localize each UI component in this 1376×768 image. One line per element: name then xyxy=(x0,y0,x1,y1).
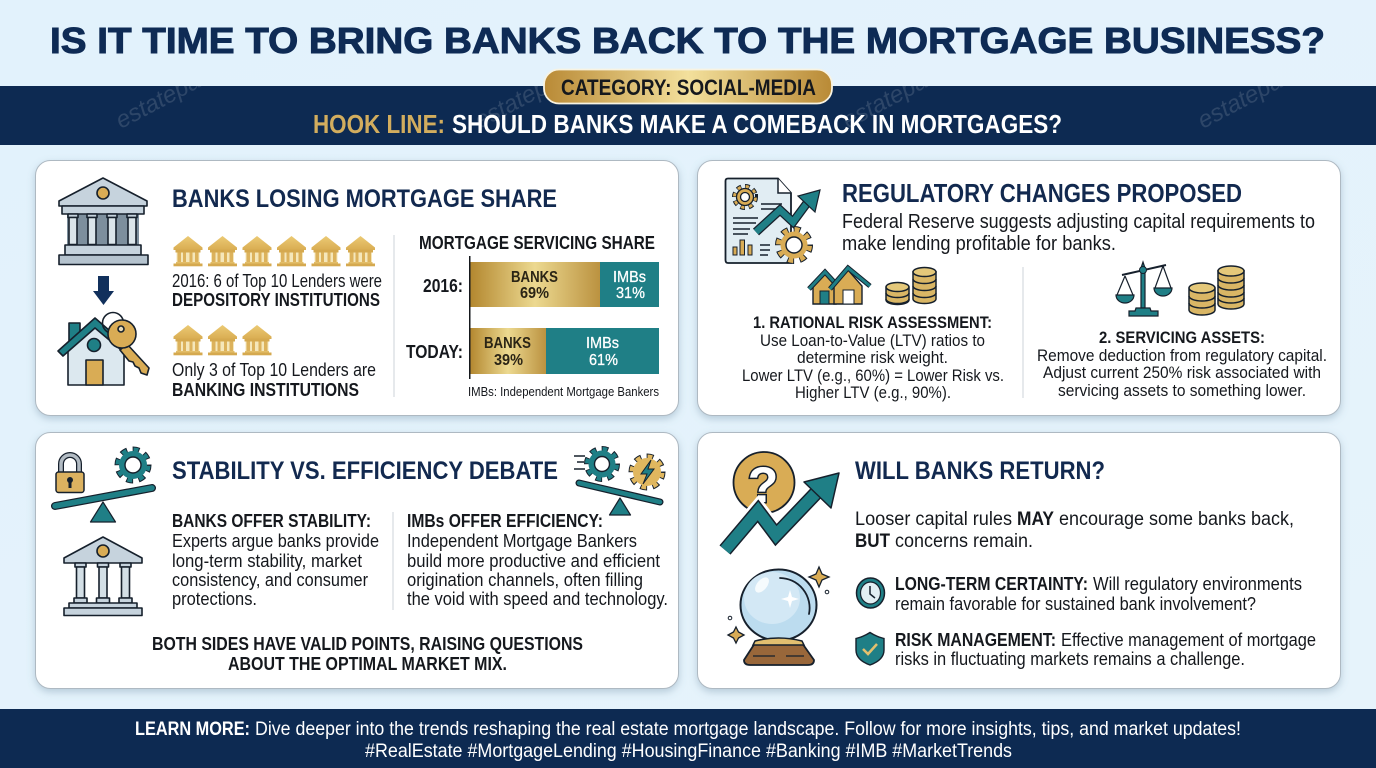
panel: banks losing mortgage share xyxy=(36,160,678,416)
text: long-term certainty: remain favorable for sustained bank involvement? xyxy=(895,594,1256,614)
text: 2016 lenders xyxy=(172,271,382,310)
icon: bank xyxy=(59,178,148,264)
intro text xyxy=(842,211,1315,255)
title: IS IT TIME TO BRING BANKS BACK TO THE MORTGAGE BUSINESS? xyxy=(50,20,1325,61)
hook line text: SHOULD BANKS MAKE A COMEBACK IN MORTGAGES? xyxy=(452,111,1062,139)
text: rational risk assessment xyxy=(742,313,1004,402)
footer banner xyxy=(0,709,1376,768)
chart title: MORTGAGE SERVICING SHARE xyxy=(419,233,655,253)
icon: document with growth arrow xyxy=(726,178,820,263)
hook line banner: estatepa xyxy=(1193,67,1287,134)
hook line banner: estatepa xyxy=(470,67,564,134)
hook line banner xyxy=(0,86,1376,145)
row label: 2016: 2016: xyxy=(423,276,463,296)
bar labels today: 39% xyxy=(494,352,523,369)
intro text: BUT xyxy=(855,530,890,552)
text: banks offer stability: BANKS OFFER STABILITY: xyxy=(172,510,371,531)
text: imbs offer efficiency: Independent Mortgage Bankers xyxy=(407,530,637,551)
text: rational risk assessment: Lower LTV (e.g., 60%) = Lower Risk vs. xyxy=(742,366,1004,385)
text: servicing assets xyxy=(1037,328,1327,400)
text: long-term certainty: LONG-TERM CERTAINTY: xyxy=(895,574,1088,594)
icon: lock and gear on seesaw xyxy=(55,450,152,522)
text: rational risk assessment: determine risk weight. xyxy=(797,348,948,367)
chart note: IMBs: Independent Mortgage Bankers xyxy=(468,384,659,399)
icons: six gold banks xyxy=(174,236,375,266)
icon: crystal ball xyxy=(728,567,829,665)
intro text xyxy=(855,508,1294,552)
text: rational risk assessment: 1. RATIONAL RISK ASSESSMENT: xyxy=(753,313,992,332)
text: risk management: RISK MANAGEMENT: xyxy=(895,630,1056,650)
icon: question mark and rising arrow: ? xyxy=(748,457,778,513)
text: servicing assets: Remove deduction from regulatory capital. xyxy=(1037,346,1327,365)
icon: houses xyxy=(809,268,870,304)
bar labels 2016 xyxy=(511,269,646,302)
bar labels today: BANKS xyxy=(484,335,531,352)
panel: regulatory changes proposed xyxy=(698,160,1340,416)
icon: bank xyxy=(64,537,142,616)
text: servicing assets: 2. SERVICING ASSETS: xyxy=(1099,328,1265,347)
learn more text: LEARN MORE: xyxy=(135,719,250,740)
text: risk management: risks in fluctuating markets remains a challenge. xyxy=(895,649,1245,669)
text: 2016 lenders: DEPOSITORY INSTITUTIONS xyxy=(172,290,380,310)
hook line banner: estatepa xyxy=(111,67,205,134)
category pill xyxy=(544,70,832,104)
panel: will banks return xyxy=(698,432,1340,688)
text: imbs offer efficiency: IMBs OFFER EFFICIENCY: xyxy=(407,510,603,531)
text: rational risk assessment: Use Loan-to-Value (LTV) ratios to xyxy=(760,331,985,350)
text: today lenders: Only 3 of Top 10 Lenders are xyxy=(172,360,376,380)
text: 2016 lenders: 2016: 6 of Top 10 Lenders were xyxy=(172,271,382,291)
row label: today: TODAY: xyxy=(406,342,463,362)
hook line banner: estatepa xyxy=(838,67,932,134)
intro text: make lending profitable for banks. xyxy=(842,233,1116,255)
text: imbs offer efficiency xyxy=(407,510,668,609)
icon: shield xyxy=(856,632,884,665)
icon: coin stacks xyxy=(1189,266,1244,315)
learn more text: Dive deeper into the trends reshaping the real estate mortgage landscape. Follow for more insights, tips, and market updates! xyxy=(255,719,1241,740)
conclusion text: ABOUT THE OPTIMAL MARKET MIX. xyxy=(228,653,507,674)
text: banks offer stability: consistency, and consumer xyxy=(172,569,368,590)
text: banks offer stability xyxy=(172,510,379,609)
bar labels today: IMBs xyxy=(586,335,619,352)
heading: WILL BANKS RETURN? xyxy=(855,457,1105,485)
text: long-term certainty xyxy=(895,574,1302,614)
bar labels today xyxy=(484,335,619,369)
text: banks offer stability: long-term stability, market xyxy=(172,550,362,571)
text: imbs offer efficiency: origination channels, often filling xyxy=(407,569,643,590)
text: rational risk assessment: Higher LTV (e.g., 90%). xyxy=(795,383,951,402)
text: banks offer stability: Experts argue banks provide xyxy=(172,530,379,551)
intro text: encourage some banks back, xyxy=(1059,508,1294,530)
bar labels 2016: 69% xyxy=(520,285,549,302)
category pill: CATEGORY: SOCIAL-MEDIA xyxy=(561,75,816,100)
bar labels today: 61% xyxy=(589,352,618,369)
text: today lenders: BANKING INSTITUTIONS xyxy=(172,380,359,400)
text: imbs offer efficiency: build more productive and efficient xyxy=(407,550,660,571)
text: banks offer stability: protections. xyxy=(172,588,257,609)
chart: mortgage servicing share xyxy=(406,233,659,399)
arrow: down xyxy=(93,276,114,305)
heading: STABILITY VS. EFFICIENCY DEBATE xyxy=(172,457,558,485)
text: servicing assets: Adjust current 250% risk associated with xyxy=(1043,363,1321,382)
text: imbs offer efficiency: the void with speed and technology. xyxy=(407,588,668,609)
heading: BANKS LOSING MORTGAGE SHARE xyxy=(172,185,557,213)
intro text: concerns remain. xyxy=(895,530,1033,552)
conclusion text xyxy=(152,633,583,674)
icon: house and key xyxy=(58,312,149,385)
icon: gears on seesaw xyxy=(574,450,662,515)
bar labels 2016: IMBs xyxy=(613,269,646,286)
icons: three gold banks xyxy=(174,325,272,355)
intro text: Looser capital rules xyxy=(855,508,1012,530)
bar labels 2016: BANKS xyxy=(511,269,558,286)
conclusion text: BOTH SIDES HAVE VALID POINTS, RAISING QUESTIONS xyxy=(152,633,583,654)
hook line text: HOOK LINE: xyxy=(313,111,445,139)
text: servicing assets: servicing assets to something lower. xyxy=(1058,381,1306,400)
text: today lenders xyxy=(172,360,376,400)
text: risk management: Effective management of mortgage xyxy=(1061,630,1316,650)
icon: coins xyxy=(886,268,936,304)
text: risk management xyxy=(895,630,1316,669)
bar labels 2016: 31% xyxy=(616,285,645,302)
icon: clock xyxy=(856,578,884,608)
intro text: MAY xyxy=(1017,508,1054,530)
icon: scales xyxy=(1116,262,1172,316)
panel: stability vs efficiency debate xyxy=(36,432,678,688)
text: long-term certainty: Will regulatory environments xyxy=(1093,574,1302,594)
hashtags: #RealEstate #MortgageLending #HousingFinance #Banking #IMB #MarketTrends xyxy=(365,741,1012,762)
intro text: Federal Reserve suggests adjusting capital requirements to xyxy=(842,211,1315,233)
heading: REGULATORY CHANGES PROPOSED xyxy=(842,178,1242,208)
icon: question mark and rising arrow xyxy=(725,452,839,550)
